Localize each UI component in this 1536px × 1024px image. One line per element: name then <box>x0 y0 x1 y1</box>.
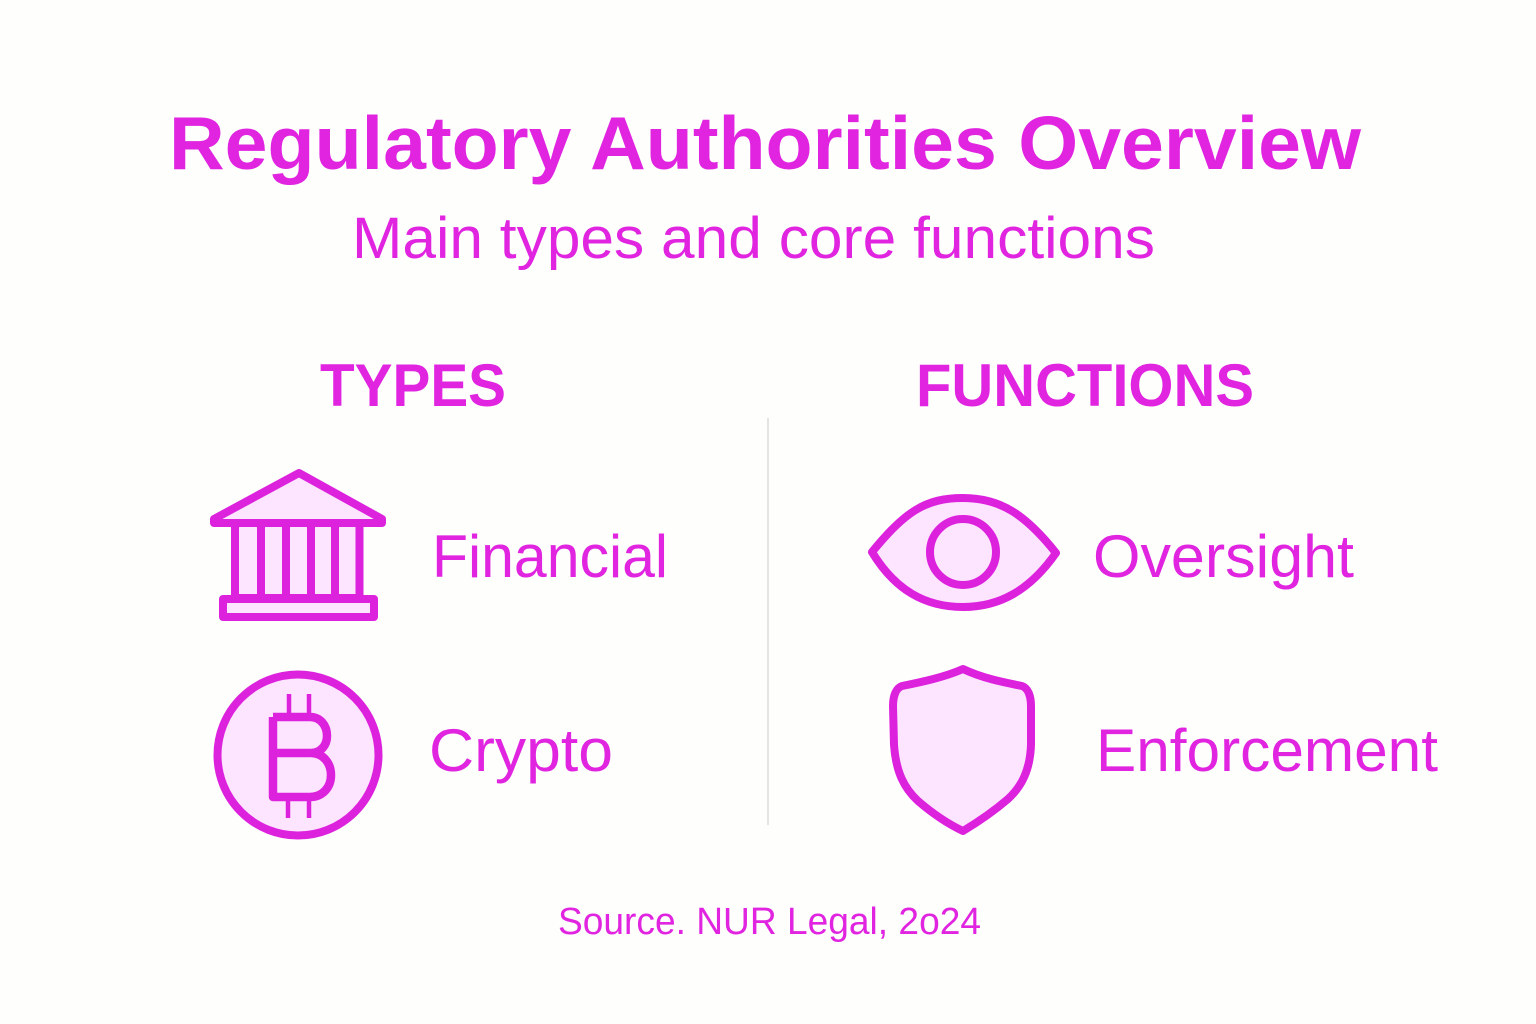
subtitle: Main types and core functions <box>352 206 1155 271</box>
heading: functions: FUNCTIONS <box>916 352 1254 419</box>
source note: Source. NUR Legal, 2o24 <box>558 901 981 943</box>
label: crypto: Crypto <box>429 717 613 784</box>
icon: bitcoin coin <box>218 674 378 836</box>
icon: shield <box>893 669 1031 831</box>
icon: eye <box>872 498 1056 607</box>
label: financial: Financial <box>432 523 668 590</box>
title: Regulatory Authorities Overview <box>169 101 1362 185</box>
heading: types: TYPES <box>320 352 506 419</box>
icon: bank building <box>214 473 382 617</box>
label: enforcement: Enforcement <box>1096 717 1438 784</box>
label: oversight: Oversight <box>1093 523 1354 590</box>
